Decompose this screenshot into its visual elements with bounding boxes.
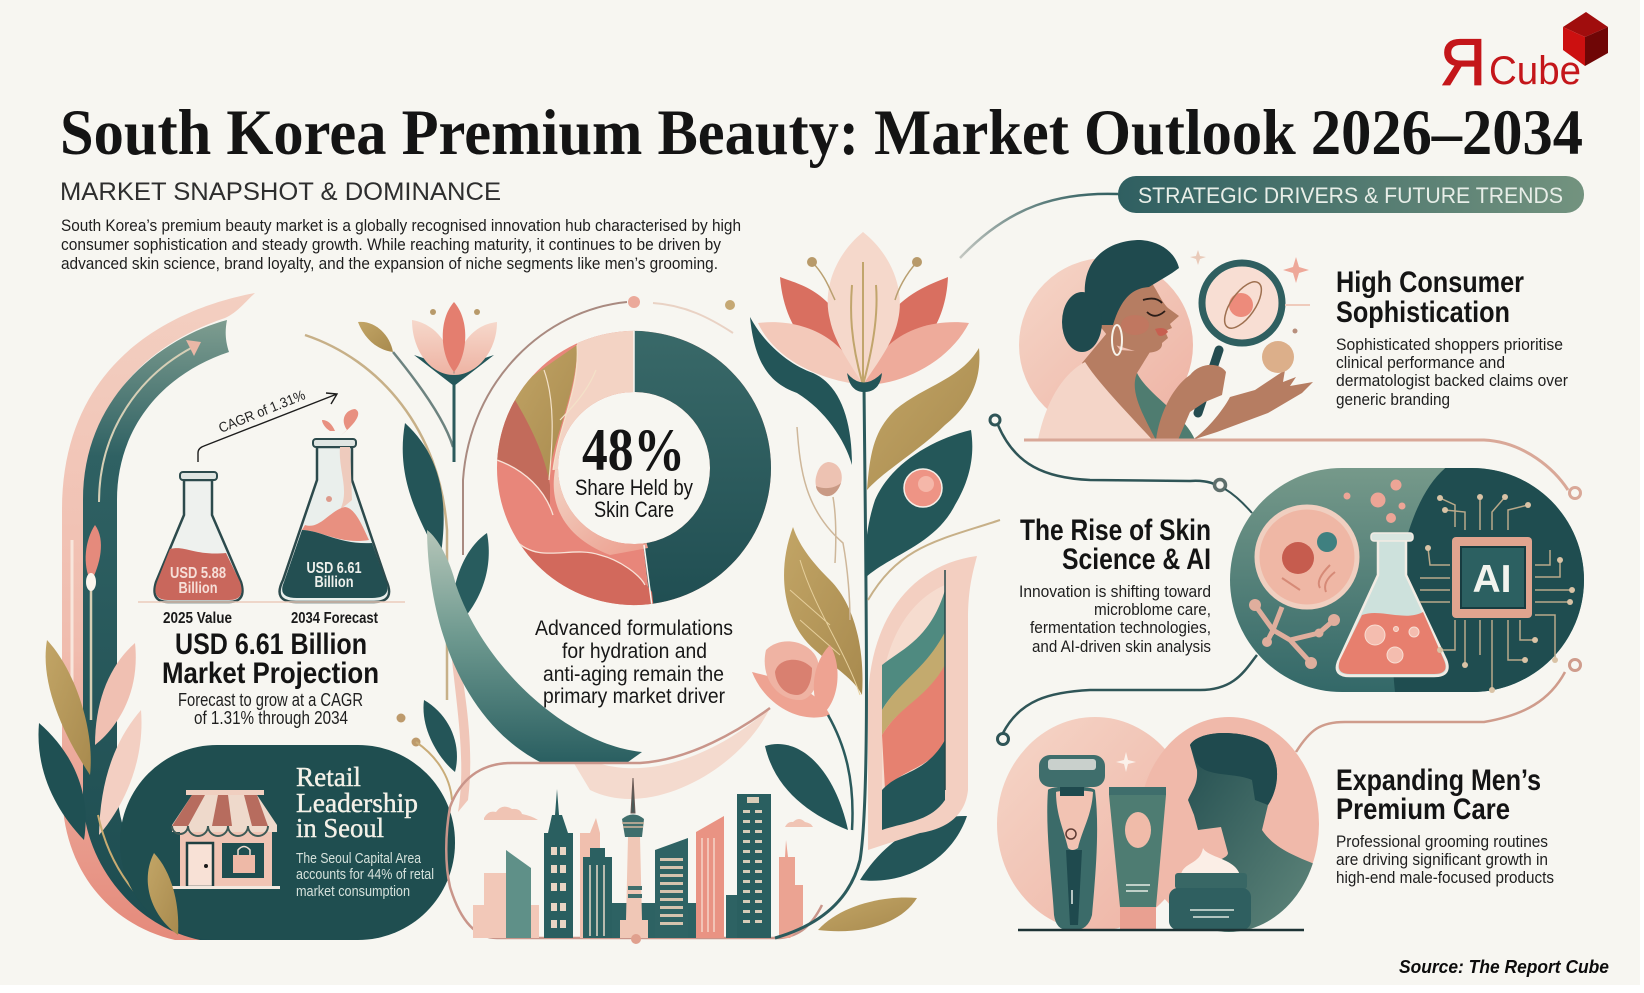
text: high consumer sophistication: clinical performance and: [1336, 353, 1505, 372]
section heading: market snapshot: MARKET SNAPSHOT & DOMINANCE: [60, 178, 501, 206]
retail heading: Retail: [296, 762, 361, 792]
icon: woman with magnifier: [1019, 240, 1313, 445]
arrow: CAGR: CAGR of 1.31%: [216, 386, 307, 436]
donut caption: Advanced formulations: [535, 617, 733, 640]
decorative arch with growth arrow: [62, 293, 255, 940]
left teal leaf: [750, 317, 852, 465]
text: expanding men's premium care: Expanding Men’s: [1336, 764, 1541, 797]
intro paragraph: advanced skin science, brand loyalty, and the expansion of niche segments like men’s grooming.: [61, 255, 718, 273]
logo: RCube: [1440, 12, 1608, 99]
decorative pink panel: [868, 556, 977, 850]
retail heading: [296, 762, 418, 843]
cell: [1257, 507, 1357, 607]
text: skin science and AI: Science & AI: [1062, 543, 1211, 576]
retail heading: Leadership: [296, 788, 418, 818]
text: expanding men's premium care: high-end male-focused products: [1336, 868, 1554, 887]
petals: [780, 277, 860, 382]
bubbles: [1344, 480, 1406, 523]
text: expanding men's premium care: [1336, 764, 1554, 887]
logo: RCube: Я: [1440, 25, 1486, 99]
AI chip: [1420, 494, 1575, 693]
text: skin science and AI: fermentation technologies,: [1030, 618, 1211, 637]
tube: [1109, 787, 1166, 795]
donut chart: skin care share 48%: 48%: [582, 417, 685, 483]
left gold leaf: [784, 527, 863, 695]
city skyline: [446, 708, 822, 944]
market projection heading: [162, 628, 379, 690]
AI chip: AI: [1472, 558, 1512, 601]
shelf line: [138, 601, 405, 603]
flask: 2025 value: Billion: [178, 580, 218, 597]
text: high consumer sophistication: [1336, 266, 1568, 409]
right gold leaf: [867, 348, 979, 490]
text: skin science and AI: microblome care,: [1094, 600, 1211, 619]
icon: storefront: [170, 790, 280, 889]
intro paragraph: South Korea’s premium beauty market is a globally recognised innovation hub characterised by high: [61, 217, 741, 235]
botanical: left leaves: [38, 640, 205, 938]
text: skin science and AI: The Rise of Skin: [1020, 514, 1211, 547]
flask: 2025 value: [154, 472, 242, 602]
intro paragraph: consumer sophistication and steady growth. While reaching maturity, it continues to be driven by: [61, 236, 722, 254]
flask labels: [163, 610, 379, 627]
gold leaf over retail panel: [148, 853, 178, 935]
flask: 2034 forecast: Billion: [314, 574, 354, 591]
icon: skin science and AI capsule: [1230, 468, 1584, 693]
market projection heading: Market Projection: [162, 657, 379, 690]
flask labels: 2025 Value: [163, 610, 232, 627]
icon: men's grooming products: [997, 717, 1325, 935]
market projection heading: USD 6.61 Billion: [175, 628, 367, 661]
retail text: market consumption: [296, 884, 410, 900]
donut caption: anti-aging remain the: [543, 663, 724, 686]
market projection text: of 1.31% through 2034: [194, 708, 348, 728]
donut caption: primary market driver: [543, 685, 725, 708]
text: skin science and AI: Innovation is shifting toward: [1019, 582, 1211, 601]
retail leadership panel: [120, 745, 455, 940]
flask: 2034 forecast: [280, 409, 389, 602]
retail text: [296, 851, 434, 900]
text: expanding men's premium care: are driving significant growth in: [1336, 850, 1548, 869]
small bud: [797, 427, 850, 620]
text: high consumer sophistication: High Consumer: [1336, 266, 1524, 299]
donut chart: skin care share 48%: Skin Care: [594, 497, 674, 522]
botanical: salmon flower and lower leaves: [752, 641, 967, 931]
text: expanding men's premium care: Professional grooming routines: [1336, 832, 1548, 851]
molecule: [1255, 605, 1334, 663]
donut chart: skin care share 48%: Share Held by: [575, 475, 693, 500]
text: skin science and AI: [1019, 514, 1211, 656]
market projection text: Forecast to grow at a CAGR: [178, 690, 363, 710]
text: high consumer sophistication: generic branding: [1336, 390, 1450, 409]
logo: RCube: Cube: [1489, 49, 1581, 93]
retail heading: in Seoul: [296, 813, 384, 843]
market projection text: [178, 690, 363, 728]
flask: 2025 value: USD 5.88: [170, 565, 226, 582]
text: high consumer sophistication: Sophisticated shoppers prioritise: [1336, 335, 1563, 354]
pill heading: strategic drivers: STRATEGIC DRIVERS & FUTURE TRENDS: [1138, 183, 1563, 208]
connector lines: [990, 415, 1580, 752]
pill heading: strategic drivers: [960, 176, 1584, 258]
flask labels: 2034 Forecast: [291, 610, 379, 627]
donut caption: for hydration and: [562, 640, 707, 663]
flask: [1337, 540, 1448, 676]
razor: [1047, 786, 1097, 930]
text: high consumer sophistication: Sophistication: [1336, 296, 1510, 329]
text: skin science and AI: and AI-driven skin analysis: [1032, 637, 1211, 656]
retail text: accounts for 44% of retal: [296, 867, 434, 883]
donut chart: skin care share 48%: [462, 296, 771, 606]
intro paragraph: [61, 217, 741, 273]
botanical: small flower and swoosh: [305, 302, 770, 812]
jar: [1181, 848, 1240, 875]
text: expanding men's premium care: Premium Care: [1336, 793, 1510, 826]
source: Source: The Report Cube: [1399, 957, 1609, 977]
donut caption: [535, 617, 733, 708]
right teal leaf with berry: [865, 430, 972, 578]
arrow: CAGR: [198, 386, 337, 462]
man silhouette: [1188, 733, 1313, 932]
retail text: The Seoul Capital Area: [296, 851, 422, 867]
botanical: big flower: [750, 232, 1000, 938]
flask: 2034 forecast: USD 6.61: [306, 560, 362, 577]
text: high consumer sophistication: dermatologist backed claims over: [1336, 371, 1568, 390]
